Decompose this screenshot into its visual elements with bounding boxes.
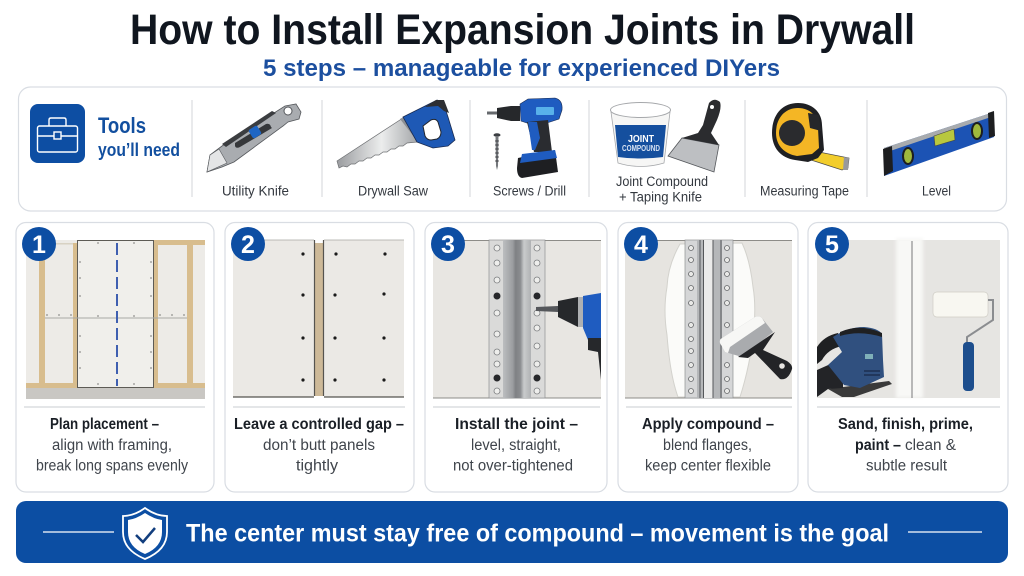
step number 4: 4 xyxy=(634,231,648,259)
label: utility knife: Utility Knife xyxy=(222,184,289,198)
step 4 text: Apply compound – xyxy=(642,416,774,433)
panel: step 4 xyxy=(618,222,798,492)
step 4 text: blend flanges, xyxy=(663,437,752,454)
step 2 text xyxy=(234,416,404,474)
icon: utility knife xyxy=(207,104,301,172)
step 2 text: tightly xyxy=(296,458,338,474)
label: measuring tape: Measuring Tape xyxy=(760,184,849,198)
icon: sander xyxy=(817,327,892,397)
step number 1: 1 xyxy=(32,231,46,259)
icon: taping knife xyxy=(720,316,792,379)
step 5 text: Sand, finish, prime, xyxy=(838,416,973,433)
icon: drywall saw xyxy=(337,100,455,168)
step number 3: 3 xyxy=(441,231,455,259)
subtitle: 5 steps – manageable for experienced DIYers xyxy=(263,55,780,82)
step 1 text: Plan placement – xyxy=(50,416,159,433)
icon: taping knife xyxy=(668,100,721,172)
step number 1 xyxy=(22,227,56,261)
step 2 text: don’t butt panels xyxy=(263,437,375,454)
step 2 text: Leave a controlled gap – xyxy=(234,416,404,433)
icon: joint compound bucket: COMPOUND xyxy=(622,144,660,153)
step 4 text xyxy=(642,416,774,474)
illustration: install metal joint with drill xyxy=(433,240,601,398)
step 1 text xyxy=(36,416,188,474)
step 3 text xyxy=(453,416,578,474)
panel: step 5 xyxy=(808,222,1008,492)
icon: drill xyxy=(487,98,562,178)
callout banner xyxy=(16,501,1008,563)
tools heading: Tools xyxy=(98,113,146,138)
step 5 text xyxy=(838,416,973,474)
step 1 text: align with framing, xyxy=(52,437,172,454)
illustration: panels with gap xyxy=(233,240,404,397)
icon: shield check xyxy=(123,508,167,559)
label: taping knife: + Taping Knife xyxy=(619,190,702,204)
panel: tools xyxy=(18,87,1006,211)
label: screws and drill: Screws / Drill xyxy=(493,184,566,198)
icon: drill xyxy=(536,293,601,380)
tools heading: you’ll need xyxy=(98,140,180,160)
step number 2: 2 xyxy=(241,231,255,259)
icon: joint compound bucket xyxy=(610,102,670,166)
panel: step 1 xyxy=(16,222,214,492)
icon: screw xyxy=(494,133,500,170)
panel: step 3 xyxy=(425,222,607,492)
step number 2 xyxy=(231,227,265,261)
step 4 text: keep center flexible xyxy=(645,458,771,474)
step 5 text: paint – xyxy=(855,437,901,454)
icon: level xyxy=(883,111,995,176)
title: How to Install Expansion Joints in Drywall xyxy=(130,6,915,54)
tools heading xyxy=(98,113,180,160)
icon: toolbox xyxy=(30,104,85,163)
illustration: wall framing plan xyxy=(26,240,205,399)
step 1 text: break long spans evenly xyxy=(36,458,188,474)
step 3 text: level, straight, xyxy=(471,437,561,454)
step number 3 xyxy=(431,227,465,261)
step number 5: 5 xyxy=(825,231,839,259)
step 3 text: Install the joint – xyxy=(455,416,578,433)
label: drywall saw: Drywall Saw xyxy=(358,184,428,198)
label: joint compound: Joint Compound xyxy=(616,174,708,189)
icon: joint compound bucket: JOINT xyxy=(628,134,654,145)
panel: step 2 xyxy=(225,222,414,492)
illustration: sand and paint xyxy=(817,238,1000,398)
step 5 text: clean & xyxy=(905,437,957,454)
step 5 text: subtle result xyxy=(866,458,948,474)
step number 5 xyxy=(815,227,849,261)
callout text: The center must stay free of compound – movement is the goal xyxy=(186,520,889,548)
icon: measuring tape xyxy=(772,103,849,170)
illustration: apply compound xyxy=(625,240,792,398)
label: level: Level xyxy=(922,184,951,198)
icon: paint roller xyxy=(933,292,993,391)
step number 4 xyxy=(624,227,658,261)
step 3 text: not over-tightened xyxy=(453,458,573,474)
